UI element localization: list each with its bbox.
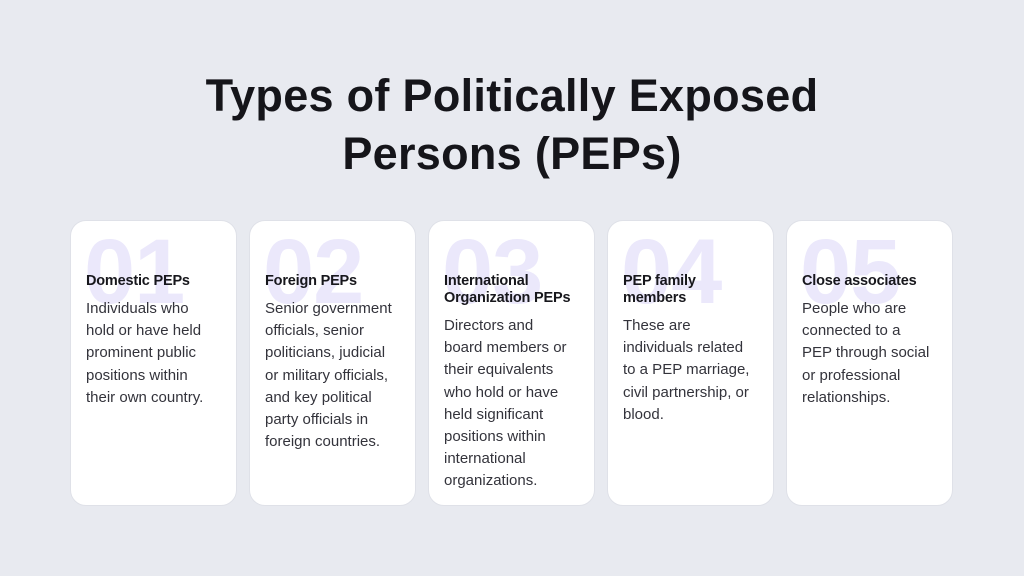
body text: their own country. bbox=[86, 389, 203, 406]
body text: officials, senior bbox=[265, 322, 364, 339]
heading: Domestic PEPs bbox=[86, 273, 190, 289]
body text: hold or have held bbox=[86, 322, 201, 339]
body text: relationships. bbox=[802, 389, 890, 406]
body text: individuals related bbox=[623, 339, 743, 356]
body text bbox=[444, 317, 567, 489]
number 03: 03 bbox=[442, 221, 542, 323]
body text: Directors and bbox=[444, 317, 533, 334]
number 05: 05 bbox=[800, 221, 900, 323]
panel: domestic PEPs bbox=[70, 220, 237, 506]
body text bbox=[86, 300, 203, 406]
body text: blood. bbox=[623, 406, 664, 423]
number 02: 02 bbox=[263, 221, 363, 323]
body text: prominent public bbox=[86, 344, 196, 361]
body text: who hold or have bbox=[444, 384, 558, 401]
panel: foreign PEPs bbox=[249, 220, 416, 506]
heading: Organization PEPs bbox=[444, 290, 570, 306]
heading: International bbox=[444, 273, 528, 289]
body text: held significant bbox=[444, 406, 543, 423]
panel: close associates bbox=[786, 220, 953, 506]
body text: party officials in bbox=[265, 411, 368, 428]
body text: positions within bbox=[86, 367, 188, 384]
body text bbox=[265, 300, 392, 450]
body text: civil partnership, or bbox=[623, 384, 749, 401]
body text: connected to a bbox=[802, 322, 900, 339]
title: Persons (PEPs) bbox=[342, 128, 682, 179]
heading: Foreign PEPs bbox=[265, 273, 357, 289]
panel: PEP family members bbox=[607, 220, 774, 506]
body text: politicians, judicial bbox=[265, 344, 385, 361]
body text: Senior government bbox=[265, 300, 392, 317]
body text: and key political bbox=[265, 389, 372, 406]
body text bbox=[802, 300, 929, 406]
body text: international bbox=[444, 450, 526, 467]
body text: Individuals who bbox=[86, 300, 189, 317]
number 01: 01 bbox=[84, 221, 184, 323]
body text: These are bbox=[623, 317, 691, 334]
body text: board members or bbox=[444, 339, 567, 356]
body text: foreign countries. bbox=[265, 433, 380, 450]
body text: positions within bbox=[444, 428, 546, 445]
body text: their equivalents bbox=[444, 361, 553, 378]
body text: to a PEP marriage, bbox=[623, 361, 749, 378]
heading bbox=[623, 273, 696, 306]
heading bbox=[444, 273, 570, 306]
number 04: 04 bbox=[621, 221, 721, 323]
title bbox=[206, 70, 818, 179]
heading: members bbox=[623, 290, 686, 306]
body text: or military officials, bbox=[265, 367, 388, 384]
body text: or professional bbox=[802, 367, 900, 384]
panel: international organization PEPs bbox=[428, 220, 595, 506]
heading: PEP family bbox=[623, 273, 696, 289]
body text: People who are bbox=[802, 300, 906, 317]
heading: Close associates bbox=[802, 273, 916, 289]
body text bbox=[623, 317, 749, 423]
body text: PEP through social bbox=[802, 344, 929, 361]
title: Types of Politically Exposed bbox=[206, 70, 818, 121]
body text: organizations. bbox=[444, 472, 537, 489]
